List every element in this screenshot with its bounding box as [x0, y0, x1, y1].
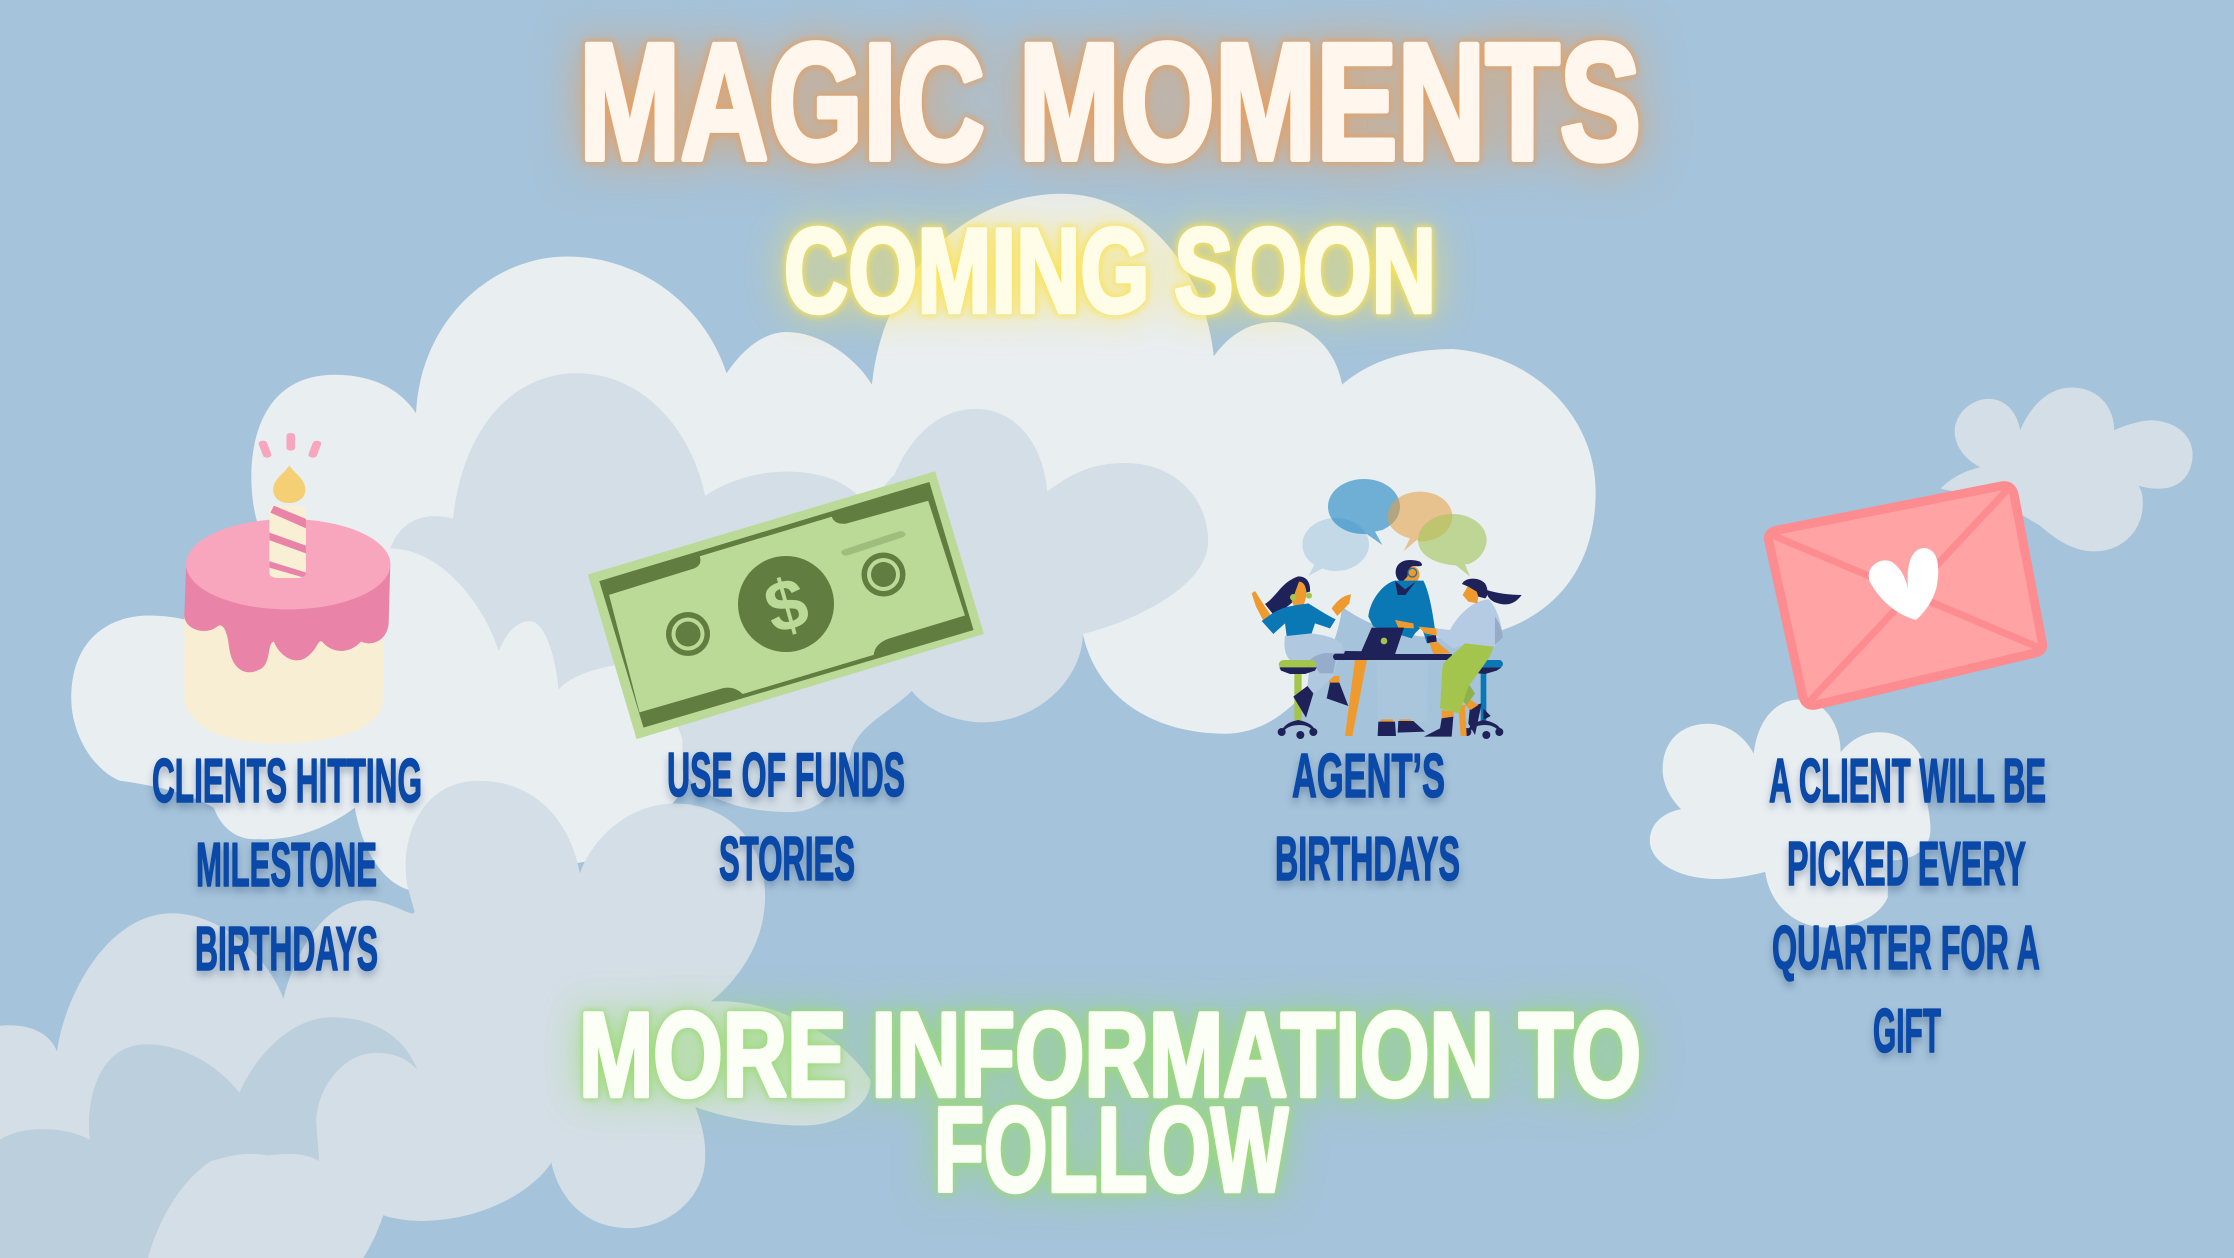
cloud: mid-tone centre cloud [390, 373, 1208, 812]
icon: birthday cake [184, 433, 390, 744]
icon: envelope with heart [1768, 486, 2043, 705]
label: clients hitting milestone birthdays: CLIENTS HITTING [152, 747, 422, 816]
label: clients hitting milestone birthdays: BIRTHDAYS [195, 915, 378, 984]
label: a client will be picked every quarter for a gift: GIFT [1873, 997, 1941, 1066]
cloud: large light cloud [71, 194, 1596, 890]
laptop and table [1333, 628, 1467, 736]
title: MAGIC MOMENTS [579, 10, 1641, 195]
speech bubbles [1302, 479, 1487, 577]
label: agent's birthdays [1275, 742, 1460, 894]
label: agent's birthdays: BIRTHDAYS [1275, 825, 1460, 894]
icing top [186, 519, 390, 609]
right person [1418, 579, 1522, 737]
right seal [862, 552, 906, 596]
label: clients hitting milestone birthdays [152, 747, 422, 984]
label: use of funds stories [667, 741, 905, 894]
envelope flap lines [1772, 489, 2040, 702]
bill paper [588, 471, 984, 739]
cloud: lower-left mid-tone cloud [0, 781, 871, 1258]
centre medallion [738, 556, 834, 652]
cloud: top-right small cloud [1940, 388, 2193, 551]
left seal [666, 612, 710, 656]
cake base [184, 617, 383, 744]
cloud: bottom-right small cloud [1650, 700, 1930, 927]
icon: dollar bill [588, 471, 984, 739]
middle person [1368, 560, 1451, 736]
icing drips [184, 563, 390, 672]
label: agent's birthdays: AGENT’S [1292, 742, 1445, 811]
left person [1252, 576, 1351, 739]
footer message: MORE INFORMATION TO [579, 988, 1641, 1122]
dollar sign: $ [756, 562, 817, 650]
sparks [258, 433, 322, 458]
cloud: lower-left dark cloud [0, 1017, 417, 1258]
flame [273, 465, 305, 503]
candle [269, 506, 307, 578]
envelope body [1768, 486, 2043, 705]
label: use of funds stories: USE OF FUNDS [667, 741, 905, 810]
footer message [579, 988, 1641, 1217]
label: clients hitting milestone birthdays: MILESTONE [196, 831, 377, 900]
label: use of funds stories: STORIES [719, 825, 855, 894]
label: a client will be picked every quarter for a gift [1769, 747, 2046, 1066]
right person stool [1463, 660, 1503, 739]
illustration: three people talking [1252, 479, 1522, 739]
subtitle: coming soon: COMING SOON [784, 204, 1436, 338]
heart [1869, 548, 1938, 620]
label: a client will be picked every quarter for a gift: PICKED EVERY [1787, 830, 2026, 899]
footer message: FOLLOW [934, 1083, 1289, 1217]
